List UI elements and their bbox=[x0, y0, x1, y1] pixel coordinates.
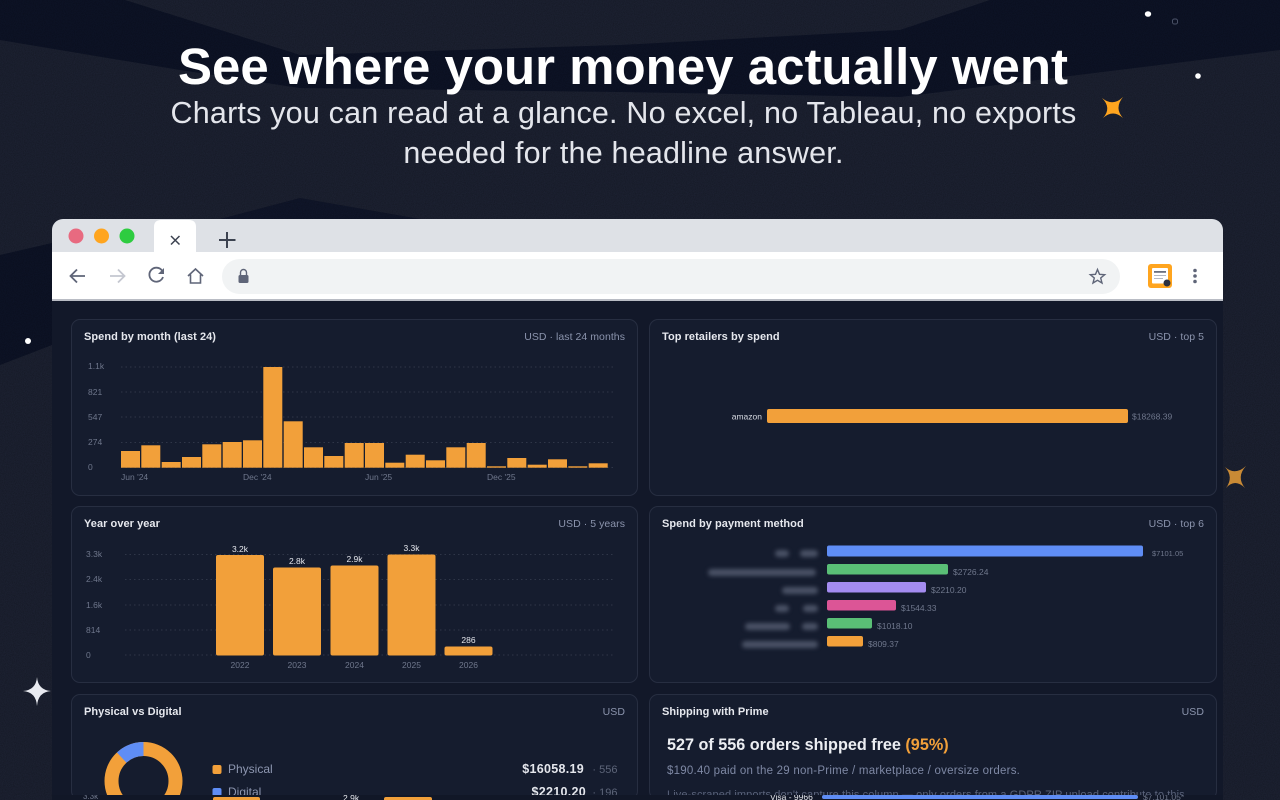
panel: shipping with prime bbox=[649, 694, 1217, 800]
bar chart: yearly spend bbox=[86, 543, 612, 670]
unit note: USD bbox=[1182, 706, 1204, 718]
bar chart: payment methods: $1018.10 bbox=[877, 621, 913, 631]
donut chart and legend: $2210.20 bbox=[531, 785, 586, 799]
prime detail line: $190.40 paid on the 29 non-Prime / marketplace / oversize orders. bbox=[667, 765, 1020, 777]
bar chart: payment methods: $2210.20 bbox=[931, 585, 967, 595]
bar chart: payment methods: $2726.24 bbox=[953, 567, 989, 577]
bar chart: yearly spend: 3.3k bbox=[86, 549, 103, 559]
bar chart: monthly spend: Jun '24 bbox=[121, 472, 148, 482]
bar chart: payment methods: $7101.05 bbox=[1152, 549, 1183, 558]
donut chart and legend bbox=[104, 742, 618, 799]
unit note: USD · top 5 bbox=[1149, 331, 1204, 343]
bar chart: yearly spend: 2.8k bbox=[289, 556, 306, 566]
bar chart: yearly spend: 814 bbox=[86, 625, 100, 635]
bar chart: yearly spend: 286 bbox=[461, 635, 476, 645]
clipped blue bar bbox=[822, 795, 1138, 798]
title: See where your money actually went bbox=[178, 38, 1068, 95]
panel: spend by payment method bbox=[649, 506, 1217, 683]
unit note: USD bbox=[603, 706, 625, 718]
donut chart and legend: · 556 bbox=[592, 764, 618, 776]
bar chart: yearly spend: 2022 bbox=[231, 660, 250, 670]
bar chart: monthly spend: 1.1k bbox=[88, 361, 105, 371]
panel: year over year bbox=[71, 506, 638, 683]
bar chart: yearly spend: 3.2k bbox=[232, 544, 249, 554]
clipped orange bar two bbox=[384, 797, 432, 800]
redacted payment labels bbox=[706, 548, 820, 650]
unit note: USD · last 24 months bbox=[524, 331, 625, 343]
bar chart: monthly spend: Dec '25 bbox=[487, 472, 516, 482]
donut chart and legend: Digital bbox=[228, 785, 261, 799]
browser chrome bbox=[52, 219, 1223, 301]
bar chart: yearly spend: 1.6k bbox=[86, 600, 103, 610]
unit note: USD · top 6 bbox=[1149, 518, 1204, 530]
bar chart: payment methods: $1544.33 bbox=[901, 603, 937, 613]
bar chart: monthly spend: Dec '24 bbox=[243, 472, 272, 482]
panel: spend by month bbox=[71, 319, 638, 496]
heading: Physical vs Digital bbox=[84, 706, 182, 718]
bar chart: retailers: amazon bbox=[732, 412, 762, 422]
prime headline stat: 527 of 556 orders shipped free (95%) bbox=[667, 736, 949, 754]
bar chart: monthly spend: 547 bbox=[88, 412, 102, 422]
bar chart: monthly spend: 0 bbox=[88, 462, 93, 472]
unit note: USD · 5 years bbox=[558, 518, 625, 530]
bar chart: payment methods bbox=[827, 546, 1183, 649]
panel: top retailers bbox=[649, 319, 1217, 496]
donut chart and legend: Physical bbox=[228, 762, 273, 776]
subtitle: needed for the headline answer. bbox=[403, 136, 844, 170]
heading: Spend by payment method bbox=[662, 518, 804, 530]
bar chart: yearly spend: 2026 bbox=[459, 660, 478, 670]
bar chart: monthly spend: Jun '25 bbox=[365, 472, 392, 482]
browser window bbox=[52, 219, 1223, 800]
bar chart: yearly spend: 2.4k bbox=[86, 574, 103, 584]
heading: Year over year bbox=[84, 518, 160, 530]
bar chart: monthly spend bbox=[88, 361, 613, 482]
bar chart: retailers bbox=[732, 409, 1172, 423]
bar chart: yearly spend: 2024 bbox=[345, 660, 364, 670]
bar chart: monthly spend: 821 bbox=[88, 387, 102, 397]
subtitle: Charts you can read at a glance. No excel, no Tableau, no exports bbox=[171, 96, 1076, 130]
donut chart and legend: · 196 bbox=[592, 787, 618, 799]
bar chart: payment methods: $809.37 bbox=[868, 639, 899, 649]
bar chart: monthly spend: 274 bbox=[88, 437, 102, 447]
donut chart and legend: $16058.19 bbox=[522, 762, 584, 776]
clipped orange bar bbox=[213, 797, 260, 800]
clipped strip of overlapping charts bbox=[52, 795, 1223, 800]
panel: physical vs digital bbox=[71, 694, 638, 800]
subtitle bbox=[171, 96, 1076, 170]
heading: Spend by month (last 24) bbox=[84, 331, 216, 343]
bar chart: retailers: $18268.39 bbox=[1132, 412, 1172, 422]
bar chart: yearly spend: 2023 bbox=[288, 660, 307, 670]
bar chart: yearly spend: 2025 bbox=[402, 660, 421, 670]
bar chart: yearly spend: 3.3k bbox=[403, 543, 420, 553]
heading: Top retailers by spend bbox=[662, 331, 780, 343]
bar chart: yearly spend: 2.9k bbox=[346, 554, 363, 564]
bar chart: yearly spend: 0 bbox=[86, 650, 91, 660]
heading: Shipping with Prime bbox=[662, 706, 769, 718]
